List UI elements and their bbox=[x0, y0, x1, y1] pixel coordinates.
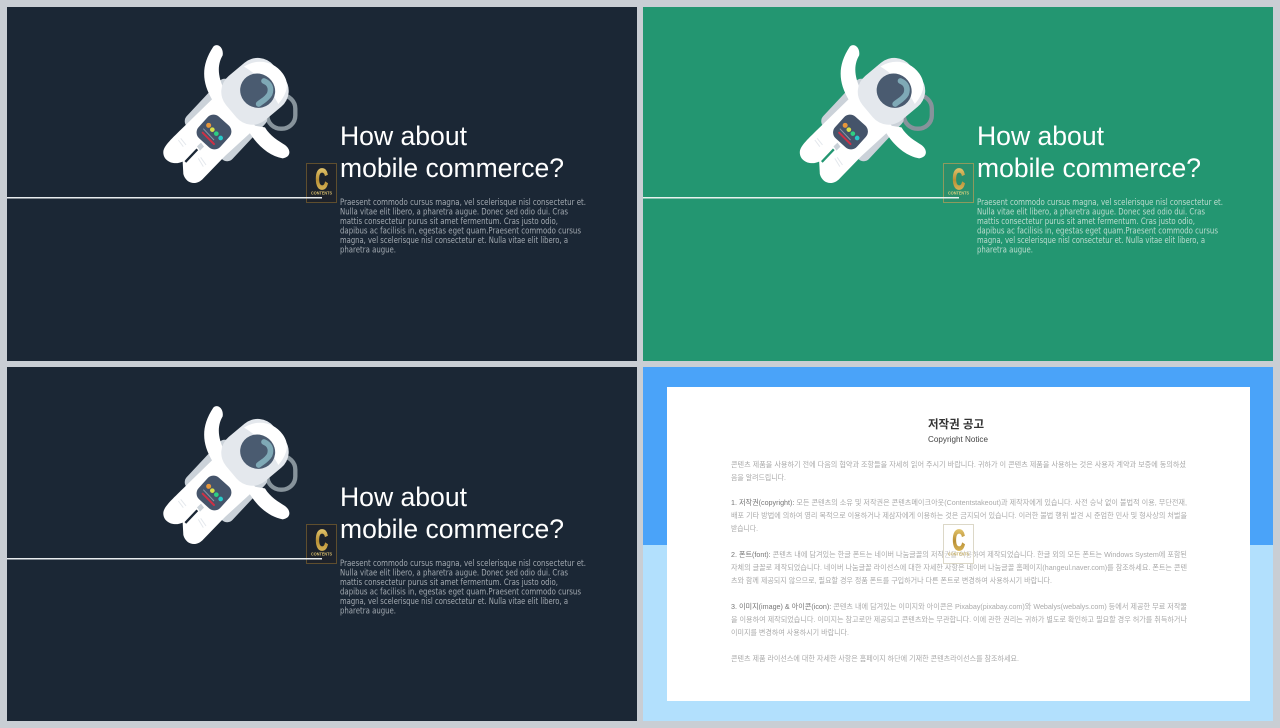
body text: Praesent commodo cursus magna, vel scelerisque nisl consectetur et. bbox=[977, 198, 1223, 208]
body text: dapibus ac facilisis in, egestas eget quam.Praesent commodo cursus bbox=[977, 226, 1218, 236]
body text: mattis consectetur purus sit amet fermentum. Cras justo odio, bbox=[977, 217, 1195, 227]
body text: Nulla vitae elit libero, a pharetra augue. Donec sed odio dui. Cras bbox=[340, 208, 568, 218]
body text: mattis consectetur purus sit amet fermentum. Cras justo odio, bbox=[340, 578, 558, 588]
body text bbox=[340, 559, 586, 616]
notice body text: 받습니다. bbox=[731, 524, 758, 533]
body text: Praesent commodo cursus magna, vel scelerisque nisl consectetur et. bbox=[340, 559, 586, 569]
notice body text bbox=[731, 460, 1187, 663]
notice body text: 이미지를 변경하여 사용하시기 바랍니다. bbox=[731, 628, 849, 637]
body text: dapibus ac facilisis in, egestas eget quam.Praesent commodo cursus bbox=[340, 588, 581, 598]
body text: pharetra augue. bbox=[340, 606, 396, 616]
notice body text: 음을 알려드립니다. bbox=[731, 473, 786, 482]
heading: How about bbox=[340, 121, 467, 151]
logo badge: CONTENTS bbox=[948, 190, 969, 196]
logo badge: C bbox=[952, 525, 965, 557]
notice title: 저작권 공고 bbox=[928, 417, 984, 431]
notice body text: 3. 이미지(image) & 아이콘(icon): 콘텐츠 내에 담겨있는 이미지와 아이콘은 Pixabay(pixabay.com)와 Webalys(webalys.com) 등에서 제공한 무료 저작물 bbox=[731, 602, 1187, 611]
body text: magna, vel scelerisque nisl consectetur et. Nulla vitae elit libero, a bbox=[977, 236, 1205, 246]
notice body text: 츠와 함께 제공되지 않으므로, 필요할 경우 정품 폰트를 구입하거나 다른 폰트로 변경하여 사용하시기 바랍니다. bbox=[731, 576, 1052, 585]
panel: dark slide top bbox=[7, 7, 637, 361]
heading: mobile commerce? bbox=[340, 153, 564, 183]
body text: Praesent commodo cursus magna, vel scelerisque nisl consectetur et. bbox=[340, 198, 586, 208]
body text: magna, vel scelerisque nisl consectetur et. Nulla vitae elit libero, a bbox=[340, 597, 568, 607]
logo badge: C bbox=[316, 164, 328, 196]
logo badge: C bbox=[316, 525, 328, 557]
heading bbox=[340, 482, 564, 544]
divider line bbox=[643, 197, 959, 198]
notice body text: 2. 폰트(font): 콘텐츠 내에 담겨있는 한글 폰트는 네이버 나눔글꼴의 저작권을 이용하여 제작되었습니다. 한글 외의 모든 폰트는 Windows System에 포함된 bbox=[731, 550, 1187, 559]
heading: How about bbox=[977, 121, 1104, 151]
divider line bbox=[7, 197, 322, 198]
heading bbox=[977, 121, 1201, 183]
logo badge bbox=[306, 524, 336, 564]
body text bbox=[340, 198, 586, 256]
logo badge bbox=[944, 164, 974, 202]
icon: astronaut bbox=[163, 406, 297, 544]
logo badge: CONTENTS bbox=[311, 552, 332, 556]
body text: dapibus ac facilisis in, egestas eget quam.Praesent commodo cursus bbox=[340, 226, 581, 236]
panel: dark slide bottom bbox=[7, 367, 637, 721]
notice body text: 배포 기타 방법에 의하여 영리 목적으로 이용하거나 제삼자에게 이용하는 것은 금지되어 있습니다. 이러한 불법 행위 발견 시 준엄한 민사 및 형사상의 처벌을 bbox=[731, 511, 1187, 520]
panel: copyright notice bbox=[643, 367, 1273, 721]
body text: Nulla vitae elit libero, a pharetra augue. Donec sed odio dui. Cras bbox=[340, 568, 568, 578]
white card bbox=[667, 387, 1250, 701]
panel: green slide bbox=[643, 7, 1273, 361]
body text: Nulla vitae elit libero, a pharetra augue. Donec sed odio dui. Cras bbox=[977, 208, 1205, 218]
icon: astronaut bbox=[163, 45, 297, 183]
divider line bbox=[7, 558, 322, 560]
heading: mobile commerce? bbox=[340, 514, 564, 544]
logo badge bbox=[944, 524, 974, 564]
notice body text: 1. 저작권(copyright): 모든 콘텐츠의 소유 및 저작권은 콘텐츠메이크아웃(Contentstakeout)과 제작자에게 있습니다. 사전 승낙 없이 불법적 이용, 무단전재, bbox=[731, 498, 1187, 507]
notice title bbox=[928, 417, 988, 444]
icon: astronaut bbox=[800, 45, 934, 183]
logo badge: C bbox=[952, 164, 965, 196]
body text bbox=[977, 198, 1223, 256]
notice body text: 을 이용하여 제작되었습니다. 이미지는 참고로만 제공되고 콘텐츠와는 무관합니다. 이에 관한 권리는 귀하가 별도로 확인하고 필요할 경우 허가를 취득하거나 bbox=[731, 615, 1187, 624]
logo badge bbox=[306, 164, 336, 202]
body text: pharetra augue. bbox=[977, 246, 1033, 256]
heading: How about bbox=[340, 482, 467, 512]
notice body text: 자체의 글꼴로 제작되었습니다. 네이버 나눔글꼴 라이선스에 대한 자세한 사항은 네이버 나눔글꼴 홈페이지(hangeul.naver.com)를 참조하세요. 폰트는 콘텐 bbox=[731, 563, 1187, 572]
body text: mattis consectetur purus sit amet fermentum. Cras justo odio, bbox=[340, 217, 558, 227]
notice title: Copyright Notice bbox=[928, 434, 988, 444]
notice body text: 콘텐츠 제품을 사용하기 전에 다음의 협약과 조항들을 자세히 읽어 주시기 바랍니다. 귀하가 이 콘텐츠 제품을 사용하는 것은 사용자 계약과 보증에 동의하셨 bbox=[731, 460, 1186, 469]
notice body text: 콘텐츠 제품 라이선스에 대한 자세한 사항은 홈페이지 하단에 기재한 콘텐츠라이선스를 참조하세요. bbox=[731, 654, 1019, 663]
body text: pharetra augue. bbox=[340, 246, 396, 256]
logo badge: CONTENTS bbox=[311, 190, 332, 196]
heading: mobile commerce? bbox=[977, 153, 1201, 183]
heading bbox=[340, 121, 564, 183]
body text: magna, vel scelerisque nisl consectetur et. Nulla vitae elit libero, a bbox=[340, 236, 568, 246]
logo badge: CONTENTS bbox=[948, 552, 969, 556]
